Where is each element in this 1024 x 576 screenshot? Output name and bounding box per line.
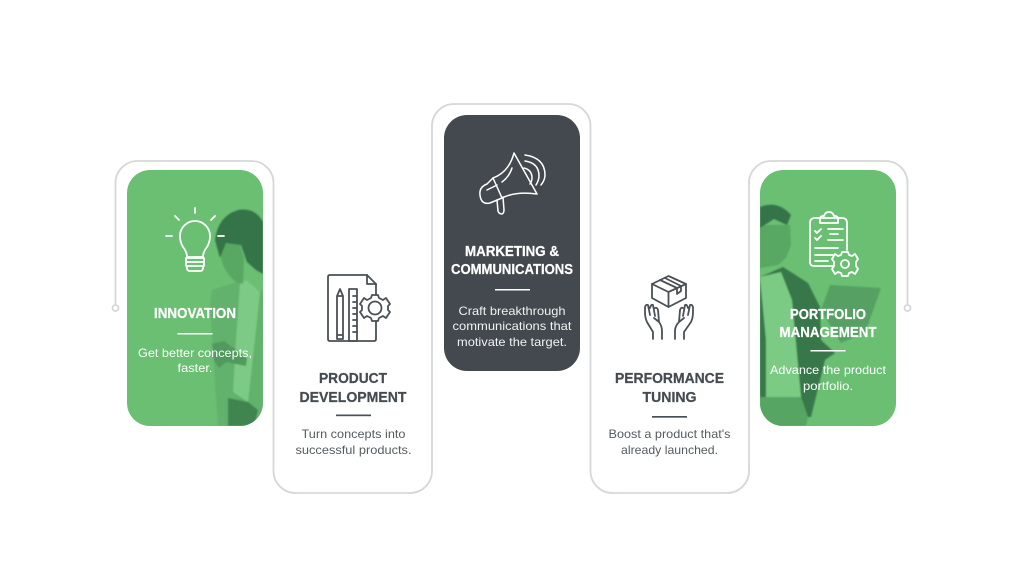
heading <box>451 244 573 278</box>
heading: PORTFOLIO <box>790 307 866 323</box>
heading: PRODUCT <box>319 371 387 387</box>
card background <box>760 170 896 426</box>
description: Turn concepts into <box>302 427 406 441</box>
heading: COMMUNICATIONS <box>451 262 573 278</box>
heading: MARKETING & <box>465 244 559 260</box>
icon: megaphone <box>480 153 545 214</box>
heading: DEVELOPMENT <box>300 390 407 406</box>
panel: portfolio management <box>760 170 896 426</box>
panel: innovation <box>127 170 263 426</box>
description: communications that <box>452 319 572 333</box>
description: Get better concepts, <box>138 346 252 360</box>
heading: INNOVATION <box>154 306 236 322</box>
divider <box>495 289 530 290</box>
description: motivate the target. <box>457 335 567 349</box>
heading: PERFORMANCE <box>615 371 724 387</box>
icon: document with ruler and gear <box>328 275 390 341</box>
photo: woman with tablet <box>210 210 263 426</box>
description <box>608 427 730 457</box>
description <box>138 346 252 375</box>
description: Boost a product that's <box>608 427 730 441</box>
divider <box>810 350 846 352</box>
description: Craft breakthrough <box>458 304 566 318</box>
card background <box>444 115 580 371</box>
heading: MANAGEMENT <box>780 325 877 341</box>
description: Advance the product <box>770 363 887 377</box>
panel: performance tuning <box>608 276 730 457</box>
icon: light bulb <box>166 208 224 271</box>
divider <box>336 414 371 416</box>
description <box>452 304 572 349</box>
card background <box>127 170 263 426</box>
description <box>296 427 412 457</box>
heading <box>615 371 724 406</box>
description: successful products. <box>296 443 412 457</box>
divider <box>652 416 687 418</box>
icon: box in hands <box>645 276 693 339</box>
heading <box>780 307 877 341</box>
divider <box>178 333 212 334</box>
photo: man with laptop <box>760 205 881 426</box>
description: portfolio. <box>803 379 853 393</box>
description: faster. <box>178 361 212 375</box>
icon: clipboard with gear <box>810 212 858 276</box>
panel: marketing and communications <box>444 115 580 371</box>
description <box>770 363 887 393</box>
heading <box>300 371 407 406</box>
heading: TUNING <box>642 390 696 406</box>
connector line <box>112 104 910 493</box>
panel: product development <box>296 275 412 457</box>
description: already launched. <box>621 443 718 457</box>
